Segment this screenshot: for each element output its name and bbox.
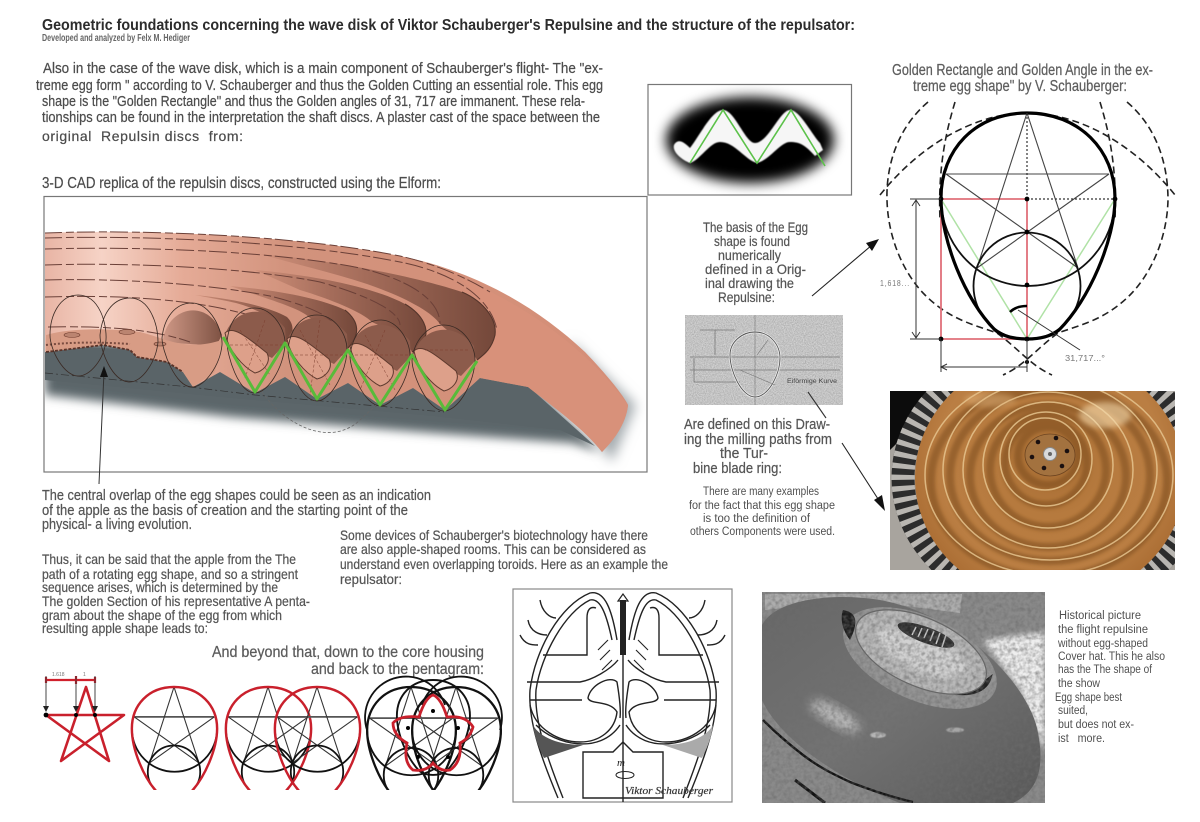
bottom block bbox=[583, 742, 663, 798]
side arrows bbox=[520, 600, 725, 645]
text: rotating egg shape: Thus, it can be said that the apple from the The bbox=[42, 551, 296, 567]
copper highlights bbox=[1079, 402, 1131, 428]
intro paragraph: original Repulsin discs from: bbox=[42, 128, 243, 144]
text: historical picture: Historical picture bbox=[1059, 610, 1141, 622]
intro paragraph: shape is the "Golden Rectangle" and thus the Golden angles of 31, 717 are immanent. These rela- bbox=[42, 93, 585, 110]
cover slot bbox=[898, 622, 954, 648]
text: rotating egg shape bbox=[42, 551, 310, 636]
text: basis of egg shape: numerically bbox=[718, 247, 781, 263]
text: biotechnology devices: are also apple-shaped rooms. This can be considered as bbox=[340, 541, 646, 557]
slots bbox=[763, 720, 913, 802]
rim band bbox=[480, 378, 628, 452]
text: rotating egg shape: The golden Section of his representative A penta- bbox=[42, 593, 310, 609]
single egg with pentagram bbox=[132, 687, 217, 798]
dashed construction arcs bbox=[880, 102, 1175, 375]
photo: copper turbine disc bbox=[890, 391, 1175, 570]
central spindle bbox=[620, 600, 626, 655]
egg outline bbox=[941, 113, 1115, 339]
text: core housing: and back to the pentagram: bbox=[311, 661, 484, 678]
text: biotechnology devices: Some devices of Schauberger's biotechnology have there bbox=[340, 527, 648, 543]
panel: plaster cast wave section bbox=[648, 84, 852, 195]
recess ring bbox=[843, 607, 997, 709]
rim shadow right bbox=[570, 340, 636, 462]
red pentagram with dimensions: 1.618 bbox=[52, 672, 65, 678]
heading: golden rectangle: treme egg shape" by V. Schauberger: bbox=[913, 78, 1127, 95]
dimension lines bbox=[910, 199, 1080, 372]
central hub bbox=[1025, 434, 1075, 476]
text: historical picture: but does not ex- bbox=[1058, 719, 1134, 731]
text: central overlap bbox=[42, 488, 431, 533]
text: central overlap: physical- a living evolution. bbox=[42, 517, 192, 533]
text: milling paths: Are defined on this Draw- bbox=[684, 417, 830, 433]
text: milling paths bbox=[684, 417, 832, 477]
lower chambers bbox=[530, 680, 620, 742]
text: central overlap: of the apple as the basis of creation and the starting point of the bbox=[42, 503, 408, 519]
central spool bbox=[616, 772, 634, 778]
text: basis of egg shape: Repulsine: bbox=[718, 289, 775, 305]
label 31,717: 31,717...° bbox=[1065, 354, 1105, 363]
text: historical picture: the show bbox=[1058, 678, 1101, 690]
original drawing scan: Eiförmige Kurve bbox=[787, 379, 838, 385]
subtitle: Developed and analyzed by Felx M. Hediger bbox=[42, 33, 190, 44]
cast shadow under disc bbox=[45, 340, 600, 452]
patent drawing of repulsator bbox=[513, 589, 732, 802]
text: many examples: for the fact that this egg shape bbox=[689, 500, 835, 512]
disc body bbox=[762, 597, 1040, 803]
text: historical picture: Egg shape best bbox=[1055, 692, 1123, 704]
text: many examples: others Components were used. bbox=[690, 526, 835, 538]
text: many examples bbox=[689, 486, 835, 538]
green angle lines bbox=[941, 199, 1115, 339]
brown cell left of first peak bbox=[163, 310, 222, 348]
copper ring bands bbox=[931, 385, 1167, 577]
text: core housing: And beyond that, down to the core housing bbox=[212, 644, 484, 661]
original drawing scan bbox=[685, 315, 843, 405]
red pentagram with dimensions bbox=[43, 672, 124, 761]
heading: golden rectangle bbox=[892, 62, 1153, 95]
text: historical picture: has the The shape of bbox=[1058, 664, 1153, 676]
text: biotechnology devices: understand even overlapping toroids. Here as an example the bbox=[340, 556, 668, 572]
five overlapping eggs with red rosette bbox=[365, 677, 502, 803]
text: central overlap: The central overlap of the egg shapes could be seen as an indication bbox=[42, 488, 431, 504]
text: basis of egg shape: shape is found bbox=[714, 233, 790, 249]
egg shape outlines bbox=[50, 295, 475, 433]
label 1,618: 1,618... bbox=[880, 279, 910, 288]
text: rotating egg shape: gram about the shape of the egg from which bbox=[42, 607, 282, 623]
text: biotechnology devices: repulsator: bbox=[340, 571, 402, 587]
text: basis of egg shape: defined in a Orig- bbox=[705, 261, 806, 277]
ring dashes bbox=[44, 232, 497, 342]
signature: Viktor Schauberger bbox=[625, 785, 714, 797]
photo grain bbox=[762, 592, 1045, 803]
copper face bbox=[915, 391, 1175, 570]
inner flange bbox=[46, 329, 222, 387]
panel heading: CAD replica: 3-D CAD replica of the repulsin discs, constructed using the Elform: bbox=[42, 175, 441, 192]
intro paragraph: Also in the case of the wave disk, which is a main component of Schauberger's flight- The "ex- bbox=[43, 60, 603, 77]
text: core housing bbox=[212, 644, 484, 678]
groove walls bbox=[260, 254, 495, 360]
hatched corners bbox=[533, 725, 583, 758]
gray surface dashed line bbox=[45, 373, 444, 412]
golden rectangle bbox=[941, 199, 1027, 339]
text: historical picture: the flight repulsine bbox=[1058, 624, 1148, 636]
text: historical picture: ist more. bbox=[1058, 733, 1105, 745]
scallop cells bbox=[225, 312, 475, 391]
photo: flight repulsine bbox=[762, 586, 1045, 803]
diagram: golden egg construction bbox=[880, 102, 1175, 375]
text: biotechnology devices bbox=[340, 527, 668, 587]
text: rotating egg shape: sequence arises, which is determined by the bbox=[42, 579, 278, 595]
text: milling paths: the Tur- bbox=[720, 446, 768, 462]
text: historical picture: without egg-shaped bbox=[1057, 638, 1148, 650]
central axis bbox=[622, 650, 624, 802]
text: historical picture: suited, bbox=[1058, 705, 1088, 717]
text: milling paths: ing the milling paths from bbox=[684, 432, 832, 448]
text: many examples: There are many examples bbox=[703, 486, 819, 498]
arrow to turbine photo bbox=[808, 392, 885, 511]
white wave cast bbox=[674, 110, 823, 163]
patent drawing of repulsator: m bbox=[617, 757, 625, 769]
green zigzag bbox=[223, 337, 477, 410]
text: basis of egg shape bbox=[703, 219, 808, 305]
disc body bbox=[44, 232, 628, 452]
intro paragraph: tionships can be found in the interpretation the shaft discs. A plaster cast of the space between the bbox=[42, 109, 600, 126]
intro paragraph: treme egg form " according to V. Schauberger and thus the Golden Cutting an essential role. This egg bbox=[36, 77, 603, 94]
turbine fins bbox=[892, 391, 1175, 570]
text: milling paths: bine blade ring: bbox=[693, 461, 782, 477]
green line on cast bbox=[690, 110, 825, 166]
pentagram and circles bbox=[941, 113, 1115, 340]
highlights bbox=[806, 694, 864, 738]
outer shell bbox=[530, 593, 617, 798]
text: historical picture: Cover hat. This he also bbox=[1058, 651, 1165, 663]
construction axes and points bbox=[1027, 113, 1115, 199]
upper chambers bbox=[543, 607, 596, 655]
text: basis of egg shape: inal drawing the bbox=[705, 275, 794, 291]
title: Geometric foundations concerning the wave disk of Viktor Schauberger's Repulsine and the structure of the repulsator: bbox=[42, 17, 855, 34]
red pentagram with dimensions: 1 bbox=[83, 672, 86, 678]
text: basis of egg shape: The basis of the Egg bbox=[703, 219, 808, 235]
text: many examples: is too the definition of bbox=[703, 513, 811, 525]
two overlapping eggs bbox=[226, 687, 360, 798]
cover bbox=[855, 609, 987, 695]
row of pentagram and egg diagrams bbox=[43, 672, 502, 803]
text: historical picture bbox=[1055, 610, 1165, 745]
panel: 3-D CAD model of repulsin discs bbox=[44, 196, 647, 472]
text: rotating egg shape: resulting apple shape leads to: bbox=[42, 620, 208, 636]
arrow to egg diagram bbox=[812, 239, 879, 296]
text: rotating egg shape: path of a rotating egg shape, and so a stringent bbox=[42, 566, 298, 582]
arrow: central overlap pointer bbox=[99, 366, 108, 484]
intro paragraph bbox=[36, 60, 603, 144]
